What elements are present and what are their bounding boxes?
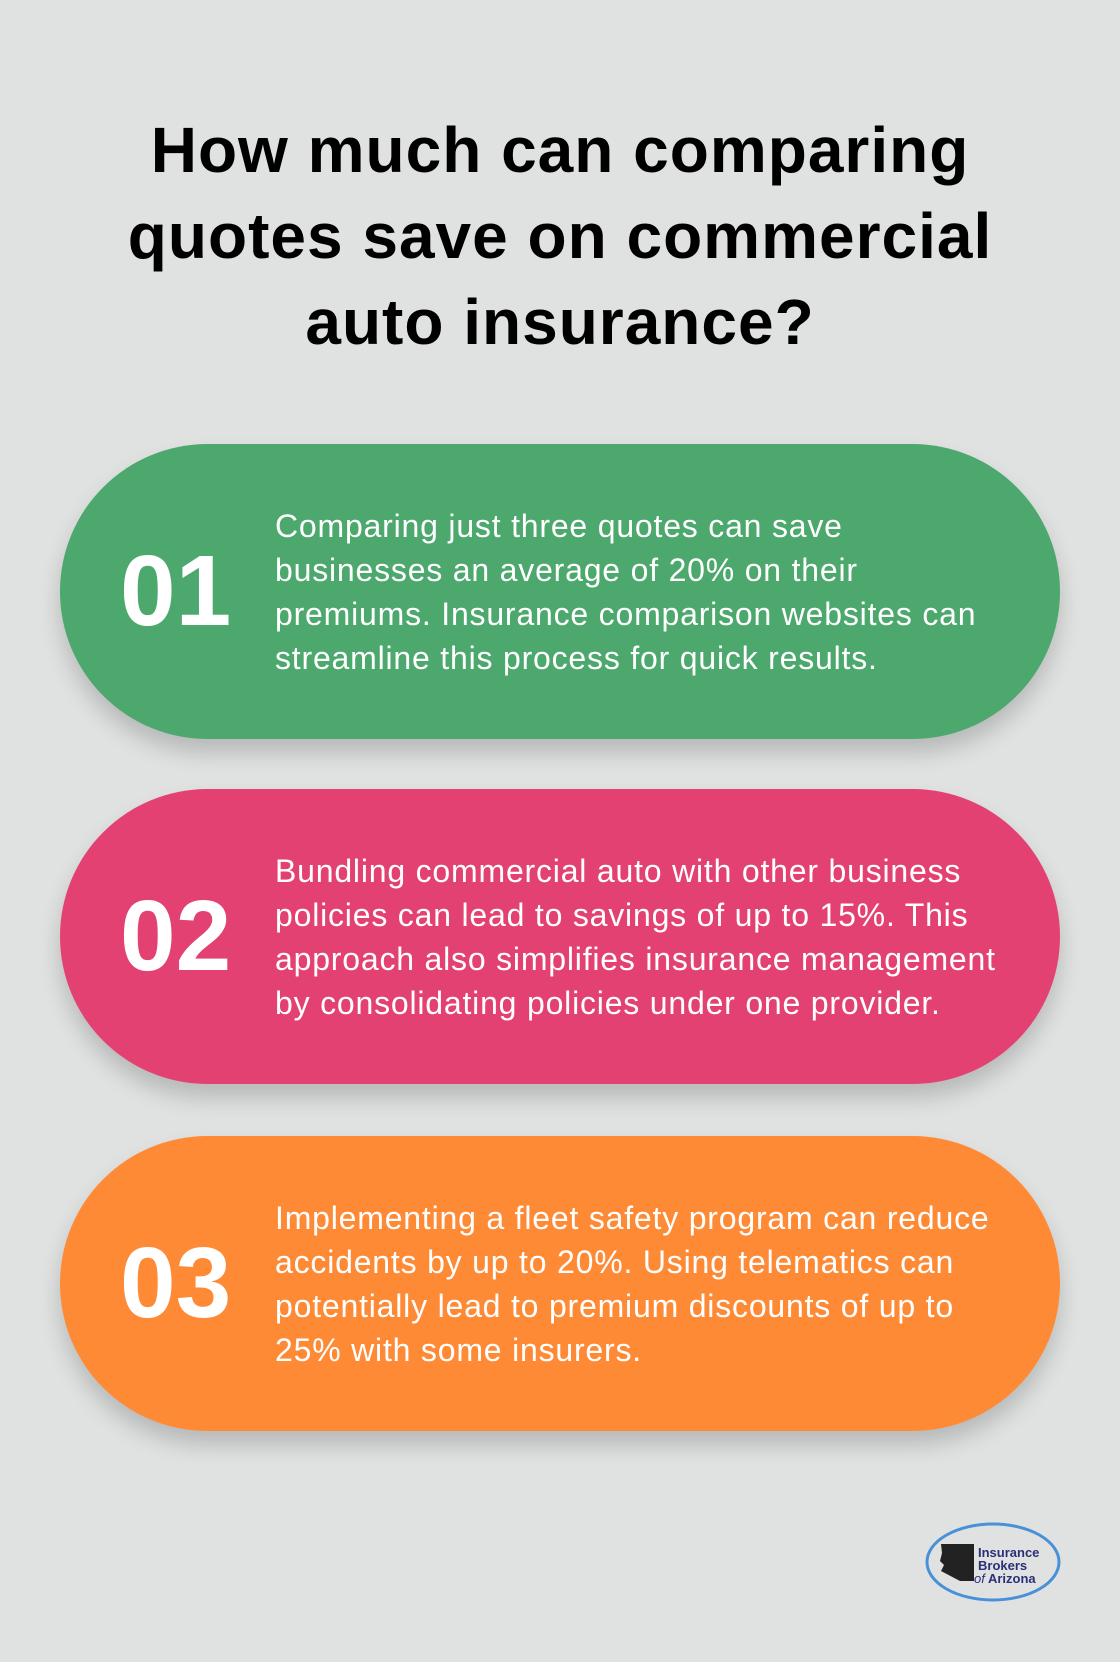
- number 01: 01: [120, 535, 231, 647]
- text block 02: Bundling commercial auto with other business: [275, 852, 961, 888]
- panel: tip 03: [60, 1136, 1060, 1431]
- text block 01: [275, 508, 976, 676]
- text block 01: Comparing just three quotes can save: [275, 508, 843, 544]
- text block 02: approach also simplifies insurance management: [275, 940, 996, 976]
- text block 01: streamline this process for quick results.: [275, 640, 878, 676]
- title: quotes save on commercial: [128, 200, 992, 272]
- text block 03: [275, 1200, 990, 1368]
- text block 03: Implementing a fleet safety program can reduce: [275, 1200, 990, 1236]
- text block 01: premiums. Insurance comparison websites can: [275, 596, 976, 632]
- text block 02: policies can lead to savings of up to 15%. This: [275, 896, 968, 932]
- logo: Brokers: [978, 1558, 1027, 1573]
- panel: tip 02: [60, 789, 1060, 1084]
- text block 02: by consolidating policies under one provider.: [275, 984, 941, 1020]
- logo: [926, 1522, 1060, 1602]
- number 03: 03: [120, 1227, 231, 1339]
- text block 01: businesses an average of 20% on their: [275, 552, 858, 588]
- panel: tip 01: [60, 444, 1060, 739]
- title: How much can comparing: [151, 114, 969, 186]
- text block 03: 25% with some insurers.: [275, 1332, 642, 1368]
- text block 03: potentially lead to premium discounts of up to: [275, 1288, 954, 1324]
- logo: Insurance: [978, 1545, 1039, 1560]
- number 02: 02: [120, 880, 231, 992]
- text block 02: [275, 852, 996, 1020]
- title: [128, 114, 992, 358]
- logo: of Arizona: [974, 1571, 1036, 1586]
- title: auto insurance?: [305, 286, 815, 358]
- text block 03: accidents by up to 20%. Using telematics can: [275, 1244, 954, 1280]
